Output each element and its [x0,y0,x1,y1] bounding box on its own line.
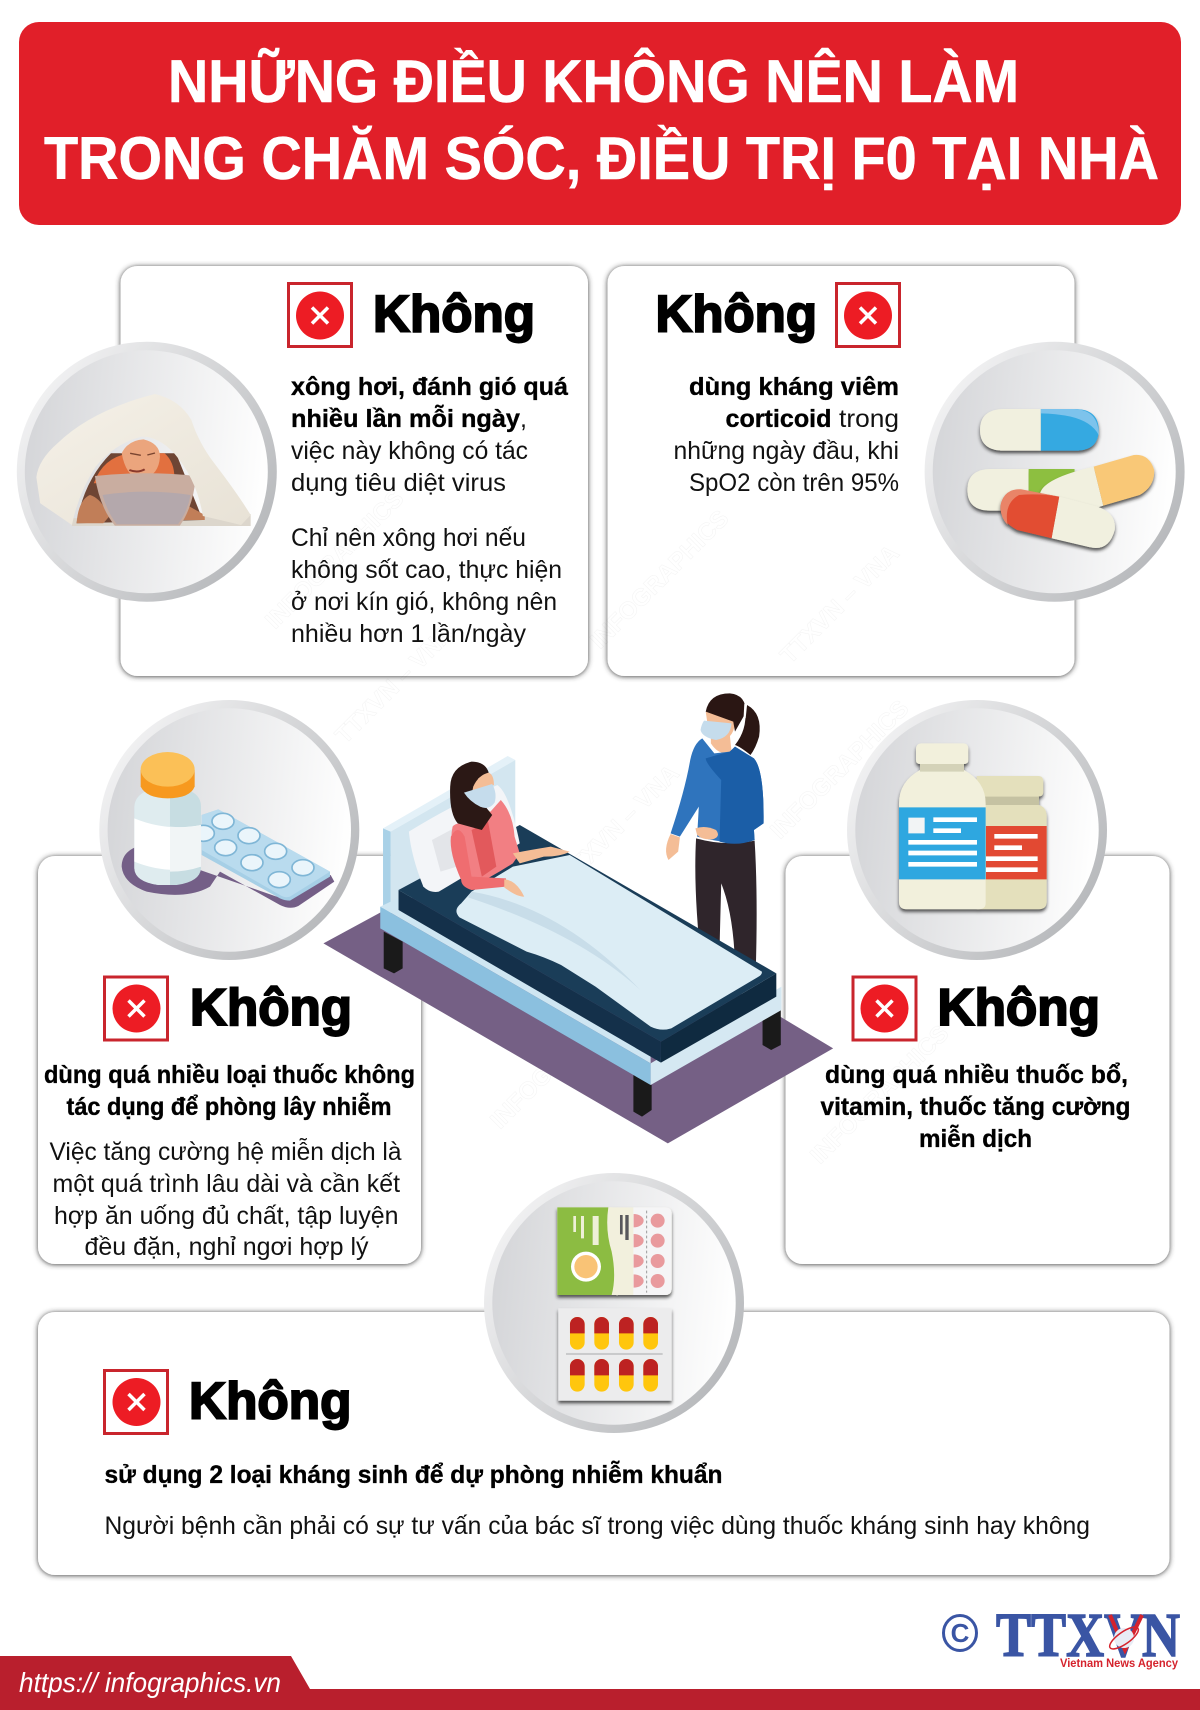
agency tagline: Vietnam News Agency [1060,1658,1179,1670]
panel: corticoid warning [608,266,1074,676]
icon: steam inhalation photo circle [17,342,277,602]
body text: nhiều lần mỗi ngày [291,403,520,433]
body text: sử dụng 2 loại kháng sinh để dự phòng nhiễm khuẩn [104,1459,722,1489]
panel: tonics and vitamins warning [786,856,1170,1264]
icon: medicine bottle and blister circle [99,700,359,960]
blanket [456,855,762,1030]
watermarks [260,485,954,1169]
watermarks: TTXVN – VNA [330,620,460,749]
body text: dùng quá nhiều loại thuốc không [44,1061,415,1089]
body text [820,1061,1130,1153]
pillow [409,785,520,892]
body text: tác dụng để phòng lây nhiễm [66,1091,392,1121]
panel: too many medicines warning [38,856,421,1264]
heading: Không [938,979,1100,1037]
heading: Không [190,979,352,1037]
body text: corticoid [726,405,832,433]
icon: supplement bottles circle [847,700,1107,960]
warning badge [104,977,168,1040]
body text: Người bệnh cần phải có sự tư vấn của bác sĩ trong việc dùng thuốc kháng sinh hay không [104,1512,1090,1540]
body text: SpO2 còn trên 95% [689,469,899,497]
body text [674,373,899,497]
floor rug [323,848,833,1143]
copyright symbol [944,1616,976,1650]
bed [380,756,781,1117]
caregiver [666,693,764,973]
body text: dụng tiêu diệt virus [291,469,506,497]
body text: trong [839,405,899,433]
watermarks: TTXVN – VNA [555,760,685,889]
body text: một quá trình lâu dài và cần kết [52,1170,400,1198]
patient torso and head [450,762,520,887]
icon: antibiotic blister packs circle [484,1173,744,1433]
body text: Chỉ nên xông hơi nếu [291,524,526,552]
watermarks: INFOGRAPHICS [485,985,634,1134]
body text: Việc tăng cường hệ miễn dịch là [50,1137,402,1166]
body text: ở nơi kín gió, không nên [291,588,557,616]
body text: không sốt cao, thực hiện [291,556,562,584]
warning badge [853,977,916,1040]
body text: , [520,405,527,433]
watermarks: TTXVN – VNA [775,540,905,669]
footer ribbon: https:// infographics.vn [19,1667,281,1698]
watermarks: INFOGRAPHICS [260,485,409,634]
icon: capsules circle [925,342,1185,602]
body text: hợp ăn uống đủ chất, tập luyện [54,1202,398,1230]
heading: Không [373,286,535,344]
body text: đều đặn, nghỉ ngơi hợp lý [84,1233,369,1261]
watermarks: INFOGRAPHICS [765,695,914,844]
TTXVN logo [944,1602,1180,1670]
watermarks: INFOGRAPHICS [585,505,734,654]
body text: dùng kháng viêm [689,373,899,401]
body text: miễn dịch [919,1123,1032,1153]
body text [104,1459,1090,1540]
body text [291,373,568,648]
warning badge [836,284,900,346]
body text: việc này không có tác [291,437,528,465]
warning badge [104,1370,168,1434]
body text: dùng quá nhiều thuốc bổ, [825,1061,1128,1089]
title banner: NHỮNG ĐIỀU KHÔNG NÊN LÀM [168,48,1019,115]
body text: nhiều hơn 1 lần/ngày [291,620,526,648]
panel: antibiotics warning [38,1312,1170,1575]
body text: xông hơi, đánh gió quá [291,373,568,401]
body text [44,1061,415,1261]
patient arms [451,830,570,897]
logo globe swoosh [1107,1615,1142,1653]
copyright symbol: C [951,1618,970,1648]
body text: vitamin, thuốc tăng cường [820,1093,1130,1121]
watermarks: INFOGRAPHICS [805,1020,954,1169]
body text: những ngày đầu, khi [674,437,899,465]
panel: steam inhalation warning [120,266,588,676]
heading: Không [656,286,817,344]
illustration: patient in bed with caregiver [323,693,833,1143]
warning badge [288,284,352,346]
heading: Không [189,1372,352,1430]
footer ribbon [0,1656,1200,1710]
title banner [19,22,1181,225]
